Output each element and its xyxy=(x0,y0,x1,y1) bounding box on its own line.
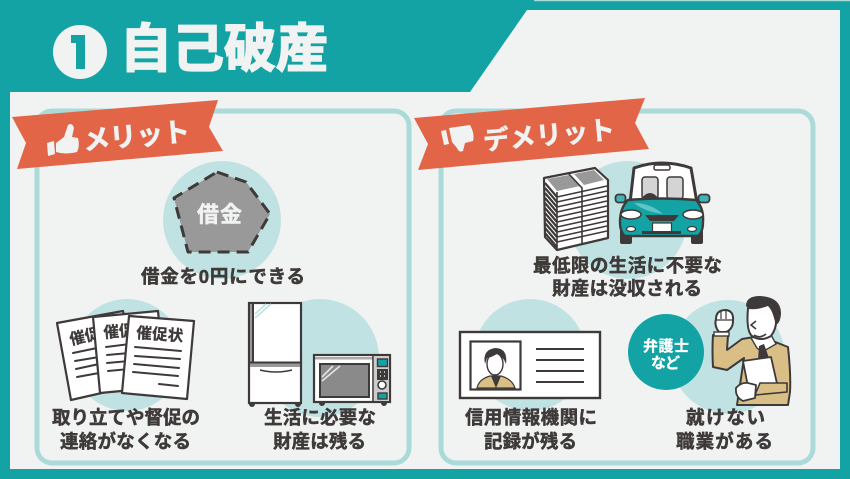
item: necessary property kept: 生活に必要な xyxy=(264,407,376,428)
item: collection notices stop: 取り立てや督促の xyxy=(52,407,200,428)
item: restricted occupations: 職業がある xyxy=(676,431,773,452)
panel: demerits xyxy=(414,98,813,463)
icon: refrigerator xyxy=(249,303,301,407)
ribbon: demerits: デメリット xyxy=(482,115,616,156)
ribbon: merits: メリット xyxy=(82,117,191,156)
badge: lawyers etc.: など xyxy=(651,355,680,372)
item: debt to zero: 借金 xyxy=(197,202,242,227)
ribbon: demerits xyxy=(414,98,649,170)
icon: businessman xyxy=(712,296,790,405)
item: credit record remains xyxy=(460,299,600,452)
panel: merits xyxy=(12,100,409,463)
item: necessary property kept: 財産は残る xyxy=(273,431,366,452)
item: collection notices stop: 催促状 xyxy=(103,320,151,342)
item: collection notices stop: 連絡がなくなる xyxy=(60,431,191,452)
item: restricted occupations: 就けない xyxy=(686,407,765,428)
item: excess property confiscated: 最低限の生活に不要な xyxy=(533,255,722,276)
item: debt to zero xyxy=(141,161,305,287)
ribbon: merits xyxy=(12,100,223,169)
title: 自己破産 xyxy=(120,21,328,79)
item: credit record remains: 記録が残る xyxy=(484,431,577,452)
icon: car xyxy=(616,163,710,244)
item: collection notices stop xyxy=(52,299,200,452)
item: debt to zero: 借金を0円にできる xyxy=(141,266,305,287)
item: excess property confiscated xyxy=(533,161,722,299)
badge: lawyers etc. xyxy=(628,314,704,390)
item: collection notices stop: 催促状 xyxy=(136,324,184,345)
item: restricted occupations xyxy=(628,296,790,452)
item: excess property confiscated: 財産は没収される xyxy=(552,278,702,299)
icon: stack of banknotes xyxy=(544,168,608,250)
item: credit record remains: 信用情報機関に xyxy=(465,407,597,428)
icon: microwave xyxy=(314,355,390,406)
badge: lawyers etc.: 弁護士 xyxy=(643,337,689,355)
icon: ID card xyxy=(460,332,600,398)
item: collection notices stop: 催促状 xyxy=(68,321,118,349)
item: necessary property kept xyxy=(249,299,390,452)
